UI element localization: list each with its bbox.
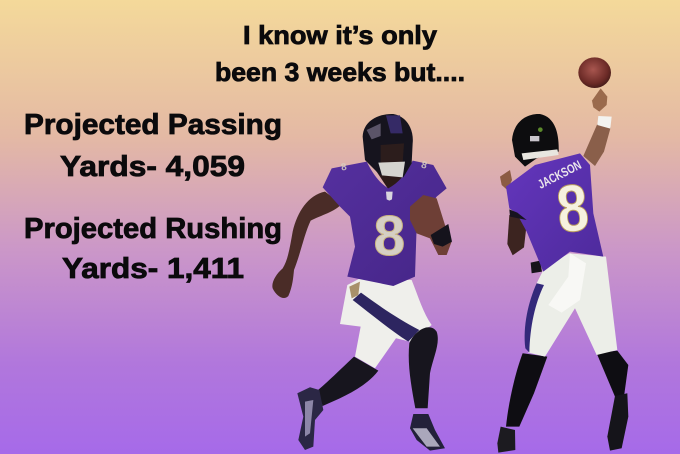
projected rushing yards text: [24, 213, 282, 285]
player throwing: [497, 57, 628, 453]
title: been 3 weeks but....: [215, 57, 465, 87]
right shoe: [607, 393, 628, 451]
sleeve cuff: [509, 209, 527, 220]
face: [381, 143, 404, 163]
right shoe: [410, 414, 445, 451]
helmet: [363, 114, 413, 177]
football: [578, 57, 611, 88]
pants stripe: [353, 293, 419, 342]
projected passing yards text: Yards- 4,059: [60, 151, 245, 183]
wristband: [431, 224, 452, 247]
NFL shield: [386, 192, 393, 201]
wristband: [597, 116, 612, 129]
shoulder numbers: [340, 160, 429, 174]
helmet: [512, 114, 559, 167]
name: JACKSON: [536, 158, 584, 192]
shoulder numbers: 8: [420, 160, 429, 172]
pants stripe: [525, 283, 544, 353]
shoulder numbers: 8: [340, 162, 348, 174]
projected rushing yards text: Projected Rushing: [24, 213, 282, 245]
jersey: [323, 161, 447, 286]
throwing arm: [583, 124, 611, 166]
towel: [548, 253, 586, 313]
left shoe: [497, 427, 515, 453]
player running with ball: [272, 114, 452, 451]
neck: [373, 165, 408, 189]
right leg: [597, 351, 628, 397]
left leg: [317, 357, 378, 406]
helmet dot: [538, 127, 543, 132]
pants: [526, 253, 617, 357]
forearm and hand with ball: [410, 195, 452, 255]
projected passing yards text: [24, 109, 282, 183]
jersey number 8: 8: [374, 205, 405, 268]
helmet flag: [530, 136, 539, 141]
left leg: [506, 353, 547, 427]
face mask: [378, 162, 405, 177]
helmet band: [522, 149, 559, 160]
belt logo: [349, 282, 360, 298]
helmet stripe: [386, 115, 403, 133]
left shoe: [297, 387, 323, 450]
back arm: [507, 215, 527, 255]
pants: [340, 278, 432, 368]
projected rushing yards text: Yards- 1,411: [62, 253, 244, 285]
hand: [592, 88, 607, 112]
right leg: [409, 327, 438, 408]
jersey: [506, 153, 603, 272]
hip pad: [531, 261, 542, 273]
title: [215, 20, 465, 87]
helmet logo: [367, 123, 381, 139]
projected passing yards text: Projected Passing: [24, 109, 282, 141]
title: I know it’s only: [243, 20, 438, 50]
back hand: [500, 170, 512, 190]
back arm: [272, 192, 342, 298]
jersey number 8: 8: [553, 171, 592, 248]
